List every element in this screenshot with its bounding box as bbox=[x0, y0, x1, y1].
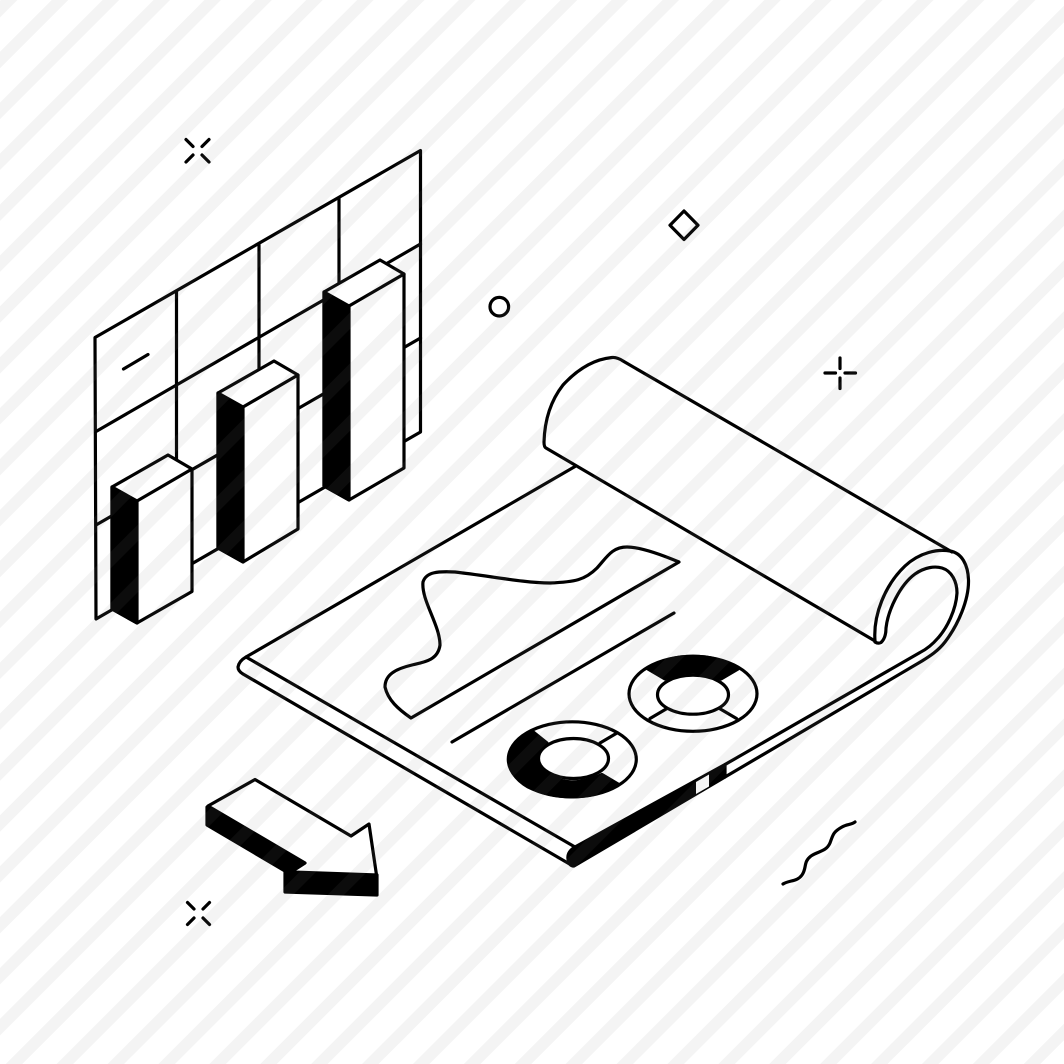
bar chart with grid bbox=[95, 150, 420, 623]
paper roll bbox=[544, 357, 952, 641]
decorative circle bbox=[490, 297, 509, 316]
donut chart left bbox=[508, 722, 636, 797]
decorative squiggle bbox=[783, 822, 855, 884]
arrow shaft side bbox=[207, 807, 305, 872]
white edge window bbox=[696, 774, 709, 794]
bar 3 bbox=[324, 260, 404, 500]
arrow bbox=[207, 780, 377, 895]
arrow top face bbox=[208, 780, 376, 875]
paper curl inner edge bbox=[725, 567, 957, 764]
decorative diamond bbox=[670, 211, 698, 240]
grid dash mark bbox=[124, 354, 148, 369]
bar 1 bbox=[112, 455, 192, 623]
paper curl outer edge bbox=[725, 550, 969, 777]
decorative x mark top bbox=[186, 140, 209, 162]
rolled paper document bbox=[238, 357, 969, 866]
text line bbox=[452, 613, 674, 742]
chart grid panel bbox=[95, 150, 420, 619]
decorative x mark bottom bbox=[188, 902, 210, 924]
decorative plus mark bbox=[825, 358, 856, 388]
paper front edge line bbox=[246, 657, 575, 847]
area chart bbox=[385, 547, 679, 718]
black edge band bbox=[568, 764, 725, 866]
bar 2 bbox=[218, 361, 298, 562]
donut chart right bbox=[629, 656, 757, 731]
arrow head side bbox=[285, 872, 377, 895]
paper sheet bbox=[238, 466, 575, 866]
